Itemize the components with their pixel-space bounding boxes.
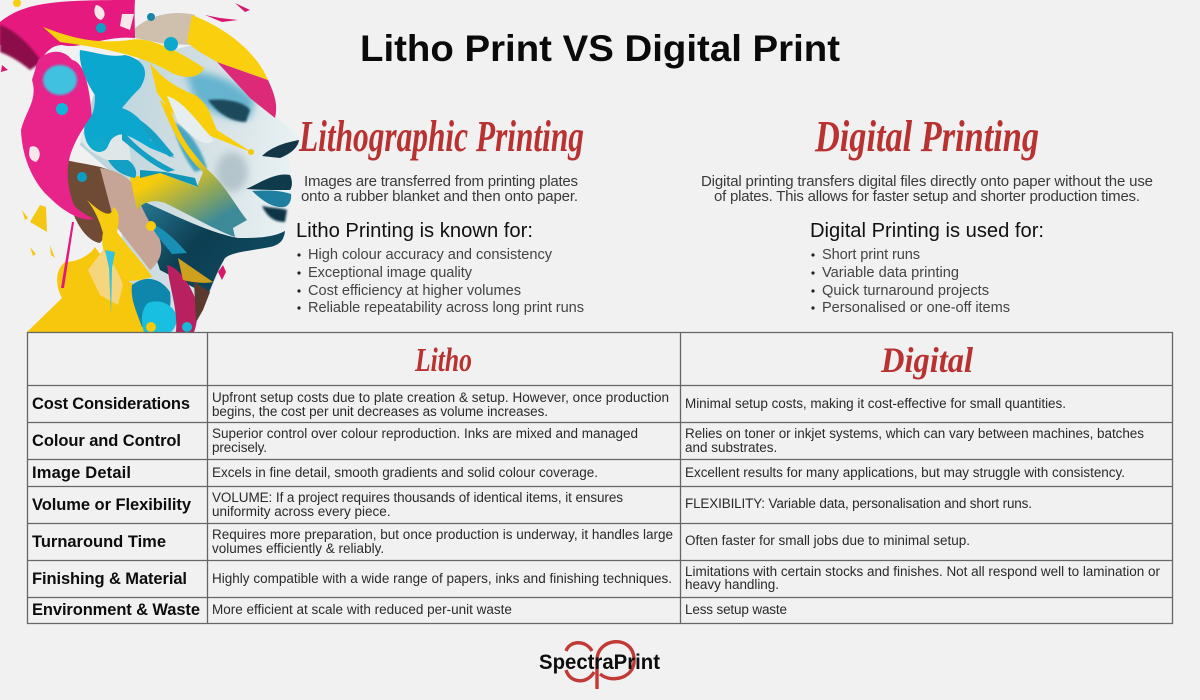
row: colour and control: Colour and Control [32, 432, 181, 450]
bright cyan base blob [142, 301, 177, 332]
row: volume or flexibility [32, 490, 1032, 519]
bullet list: digital [811, 247, 1010, 316]
description: litho: Images are transferred from printing plates [304, 173, 578, 190]
face base [80, 45, 299, 332]
row: turnaround time: Often faster for small jobs due to minimal setup. [685, 533, 970, 548]
description: digital: Digital printing transfers digital files directly onto paper without the use [701, 173, 1153, 190]
nostril shadow [262, 140, 299, 158]
row: turnaround time: Turnaround Time [32, 533, 166, 551]
pink hair mass [21, 52, 94, 219]
row: environment and waste [32, 601, 787, 619]
title: Litho Print VS Digital Print [360, 28, 840, 69]
cyan drip [105, 250, 115, 315]
upper lip [246, 174, 292, 190]
row: finishing and material: heavy handling. [685, 577, 779, 592]
row: image detail: Excels in fine detail, smooth gradients and solid colour coverage. [212, 465, 598, 480]
bullet list: digital: Variable data printing [822, 265, 959, 281]
magenta base [167, 265, 197, 332]
bullet list: litho: Cost efficiency at higher volumes [308, 283, 521, 299]
row: turnaround time: volumes efficiently & reliably. [212, 541, 384, 556]
pink top left splash [0, 0, 135, 62]
bullet list: digital: Short print runs [822, 247, 920, 263]
row: colour and control: Superior control over colour reproduction. Inks are mixed and managed [212, 426, 638, 441]
bullet list: digital: Personalised or one-off items [822, 300, 1010, 316]
chin shadow [262, 206, 287, 222]
cheek blue [172, 122, 207, 172]
cyan neck streak [150, 223, 187, 254]
table grid [28, 332, 1172, 624]
panel: lithographic printing [296, 112, 584, 316]
row: cost considerations [32, 390, 1066, 419]
logo: SpectraPrint [539, 642, 660, 689]
pale yellow patch [88, 250, 123, 305]
lower lip [252, 190, 291, 207]
logo monogram [566, 642, 634, 689]
row: turnaround time [32, 527, 970, 556]
panel: digital printing [701, 112, 1153, 316]
blurred cyan [43, 65, 77, 95]
heading: Digital Printing: Digital Printing [814, 112, 1039, 161]
bullet list: litho: High colour accuracy and consistency [308, 247, 553, 263]
teal band [140, 170, 198, 187]
yellow base splash [27, 247, 148, 332]
row: cost considerations: Upfront setup costs due to plate creation & setup. However, once production [212, 390, 669, 405]
bullet list: litho: Reliable repeatability across long print runs [308, 300, 584, 316]
description: digital [701, 173, 1153, 205]
row: environment and waste: More efficient at scale with reduced per-unit waste [212, 602, 512, 617]
row: cost considerations: begins, the cost per unit decreases as volume increases. [212, 404, 548, 419]
column header: Digital: Digital [880, 340, 973, 380]
row: volume or flexibility: FLEXIBILITY: Variable data, personalisation and short runs. [685, 496, 1032, 511]
row: volume or flexibility: Volume or Flexibility [32, 496, 192, 514]
row: image detail: Excellent results for many applications, but may struggle with consistency. [685, 465, 1125, 480]
description: litho [301, 173, 578, 205]
yellow eye drip [150, 63, 253, 153]
neck dark [135, 198, 285, 295]
cyan cheek streaks [108, 120, 175, 178]
yellow cheek patch [130, 100, 247, 237]
cyan hair blobs [80, 50, 175, 158]
eye socket shadow [208, 99, 250, 122]
yellow forehead band [43, 27, 204, 77]
row: volume or flexibility: VOLUME: If a project requires thousands of identical items, it ensures [212, 490, 623, 505]
row: volume or flexibility: uniformity across every piece. [212, 504, 391, 519]
subheading: litho known for: Litho Printing is known for: [296, 220, 533, 242]
tan neck patch [178, 258, 213, 283]
row: environment and waste: Less setup waste [685, 602, 787, 617]
row: turnaround time: Requires more preparation, but once production is underway, it handles large [212, 527, 673, 542]
white face patch [167, 96, 214, 143]
row: finishing and material: Finishing & Material [32, 570, 187, 588]
ear [80, 128, 131, 166]
description: litho: onto a rubber blanket and then onto paper. [301, 188, 578, 205]
row: finishing and material: Limitations with certain stocks and finishes. Not all respond well to lamination or [685, 564, 1160, 579]
tan neck [100, 168, 161, 270]
row: colour and control: precisely. [212, 440, 267, 455]
row: environment and waste: Environment & Waste [32, 601, 200, 619]
bullet list: litho [297, 247, 584, 316]
row: cost considerations: Minimal setup costs, making it cost-effective for small quantities. [685, 396, 1066, 411]
column header: Litho: Litho [414, 342, 472, 379]
comparison table [28, 332, 1172, 624]
brown neck edge [194, 282, 210, 322]
row: cost considerations: Cost Considerations [32, 395, 190, 413]
back hair brown [65, 160, 120, 243]
blond top hair [133, 13, 195, 45]
pink head band [217, 62, 276, 118]
yellow neck splash [87, 200, 152, 281]
dark magenta shadow [0, 25, 42, 70]
description: digital: of plates. This allows for faster setup and shorter production times. [714, 188, 1140, 205]
yellow top stripe [187, 15, 268, 80]
pink drip [61, 222, 74, 288]
white flecks [29, 5, 134, 162]
logo wordmark: SpectraPrint [539, 651, 660, 674]
pink specks [1, 3, 250, 280]
row: finishing and material [32, 564, 1160, 592]
row: image detail [32, 464, 1125, 482]
illustration: paint-splashed face [0, 0, 299, 332]
bullet list: litho: Exceptional image quality [308, 265, 473, 281]
teal lower blob [132, 279, 171, 327]
mid cheek grey [216, 152, 248, 192]
subheading: digital used for: Digital Printing is used for: [810, 220, 1044, 242]
row: colour and control [32, 426, 1144, 455]
row: finishing and material: Highly compatible with a wide range of papers, inks and finishing techniques. [212, 571, 672, 586]
yellow paint drops [22, 205, 55, 258]
paint dots [13, 0, 254, 332]
row: image detail: Image Detail [32, 464, 131, 482]
row: colour and control: Relies on toner or inkjet systems, which can vary between machines, batches [685, 426, 1144, 441]
cyan dot ear [92, 137, 106, 151]
bullet list: digital: Quick turnaround projects [822, 283, 989, 299]
heading: Lithographic Printing: Lithographic Printing [298, 112, 584, 161]
row: colour and control: and substrates. [685, 440, 777, 455]
blue forehead shading [185, 72, 255, 119]
